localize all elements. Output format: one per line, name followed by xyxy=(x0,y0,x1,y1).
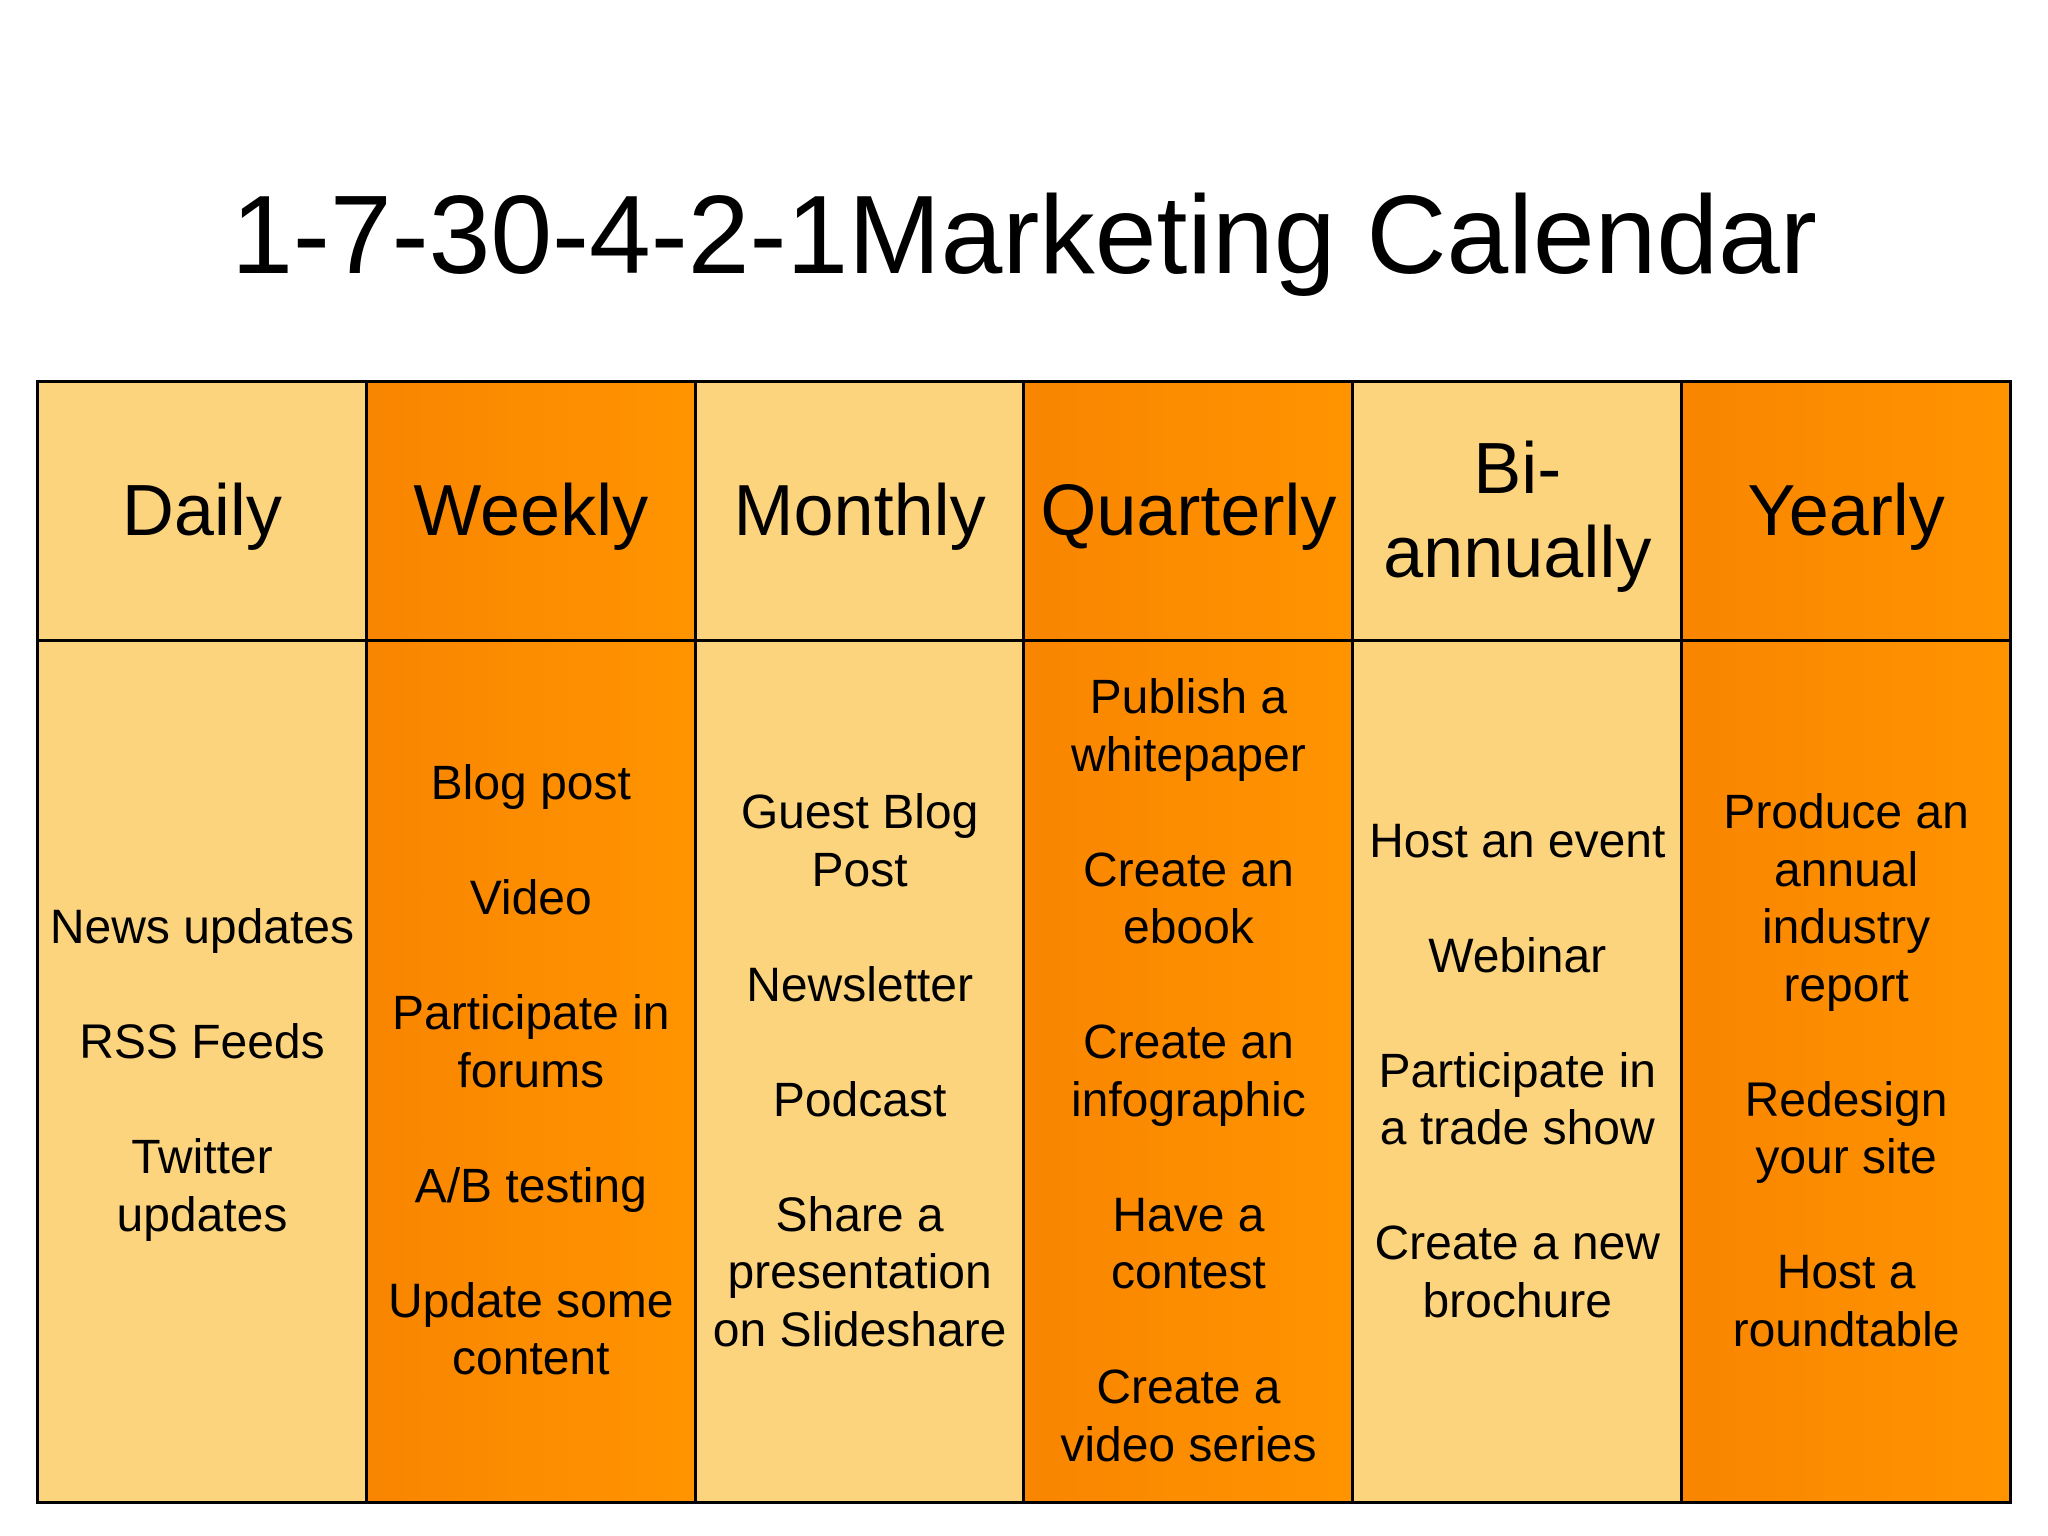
list: weekly tasks xyxy=(388,757,673,1385)
list: bi-annual tasks: Webinar xyxy=(1428,930,1606,983)
list: monthly tasks: Guest Blog xyxy=(741,786,978,839)
header: daily xyxy=(39,383,365,642)
list: quarterly tasks: Create a xyxy=(1096,1361,1280,1414)
list: quarterly tasks xyxy=(1060,671,1316,1472)
list: quarterly tasks: Have a xyxy=(1112,1188,1264,1242)
title: 1-7-30-4-2-1Marketing Calendar xyxy=(231,173,1817,297)
header: weekly: Weekly xyxy=(413,471,648,551)
header: monthly: Monthly xyxy=(734,471,986,551)
list: weekly tasks: Blog post xyxy=(431,757,631,810)
column: weekly xyxy=(368,383,697,1501)
list: monthly tasks: on Slideshare xyxy=(713,1304,1006,1356)
list: monthly tasks: Post xyxy=(812,844,908,896)
list: quarterly tasks: ebook xyxy=(1123,901,1254,954)
column: daily xyxy=(39,383,368,1501)
list: weekly tasks: forums xyxy=(457,1045,604,1098)
list: yearly tasks xyxy=(1723,786,1969,1356)
header: yearly: Yearly xyxy=(1747,471,1945,551)
list: monthly tasks: Newsletter xyxy=(746,958,973,1012)
list: monthly tasks xyxy=(713,786,1006,1356)
list: quarterly tasks: Create an xyxy=(1083,1016,1294,1069)
list: quarterly tasks: contest xyxy=(1111,1246,1266,1299)
column: bi-annually xyxy=(1354,383,1683,1501)
list: weekly tasks: A/B testing xyxy=(415,1160,647,1213)
list: yearly tasks: Produce an xyxy=(1723,786,1969,839)
list: daily tasks: News updates xyxy=(50,901,354,954)
column: monthly xyxy=(697,383,1025,1501)
header: quarterly xyxy=(1025,383,1351,642)
header: bi-annually: Bi- xyxy=(1473,429,1561,509)
header: monthly xyxy=(697,383,1022,642)
list: monthly tasks: Share a xyxy=(776,1188,944,1242)
list: yearly tasks: roundtable xyxy=(1733,1304,1959,1356)
list: bi-annual tasks: brochure xyxy=(1422,1275,1612,1328)
header: yearly xyxy=(1683,383,2009,642)
list: yearly tasks: Redesign xyxy=(1745,1074,1947,1126)
list: quarterly tasks: Publish a xyxy=(1090,671,1287,724)
list: daily tasks: Twitter xyxy=(131,1131,273,1184)
header: quarterly: Quarterly xyxy=(1040,471,1336,551)
list: bi-annual tasks: a trade show xyxy=(1380,1102,1655,1155)
list: bi-annual tasks: Create a new xyxy=(1374,1217,1660,1270)
column: yearly xyxy=(1683,383,2009,1501)
list: monthly tasks: Podcast xyxy=(773,1074,946,1126)
header: daily: Daily xyxy=(122,471,282,551)
list: weekly tasks: Update some xyxy=(388,1275,673,1328)
list: weekly tasks: content xyxy=(452,1332,609,1385)
table: marketing calendar xyxy=(36,380,2012,1504)
list: daily tasks xyxy=(50,901,354,1242)
list: bi-annual tasks: Host an event xyxy=(1369,815,1665,868)
list: quarterly tasks: infographic xyxy=(1071,1074,1306,1126)
list: daily tasks: RSS Feeds xyxy=(79,1016,325,1069)
list: weekly tasks: Video xyxy=(470,872,592,925)
header: bi-annually: annually xyxy=(1383,513,1651,593)
list: quarterly tasks: video series xyxy=(1060,1418,1316,1472)
list: yearly tasks: industry xyxy=(1762,901,1930,954)
list: yearly tasks: annual xyxy=(1774,844,1918,896)
list: daily tasks: updates xyxy=(116,1188,287,1242)
column: quarterly xyxy=(1025,383,1354,1501)
list: yearly tasks: Host a xyxy=(1777,1246,1915,1299)
list: bi-annual tasks xyxy=(1369,815,1665,1328)
list: weekly tasks: Participate in xyxy=(392,987,669,1040)
list: bi-annual tasks: Participate in xyxy=(1378,1045,1656,1098)
list: yearly tasks: report xyxy=(1783,958,1909,1012)
list: quarterly tasks: whitepaper xyxy=(1071,728,1306,782)
header: bi-annually xyxy=(1354,383,1680,642)
list: monthly tasks: presentation xyxy=(727,1246,992,1299)
list: yearly tasks: your site xyxy=(1755,1131,1937,1184)
list: quarterly tasks: Create an xyxy=(1083,844,1294,896)
header: weekly xyxy=(368,383,694,642)
